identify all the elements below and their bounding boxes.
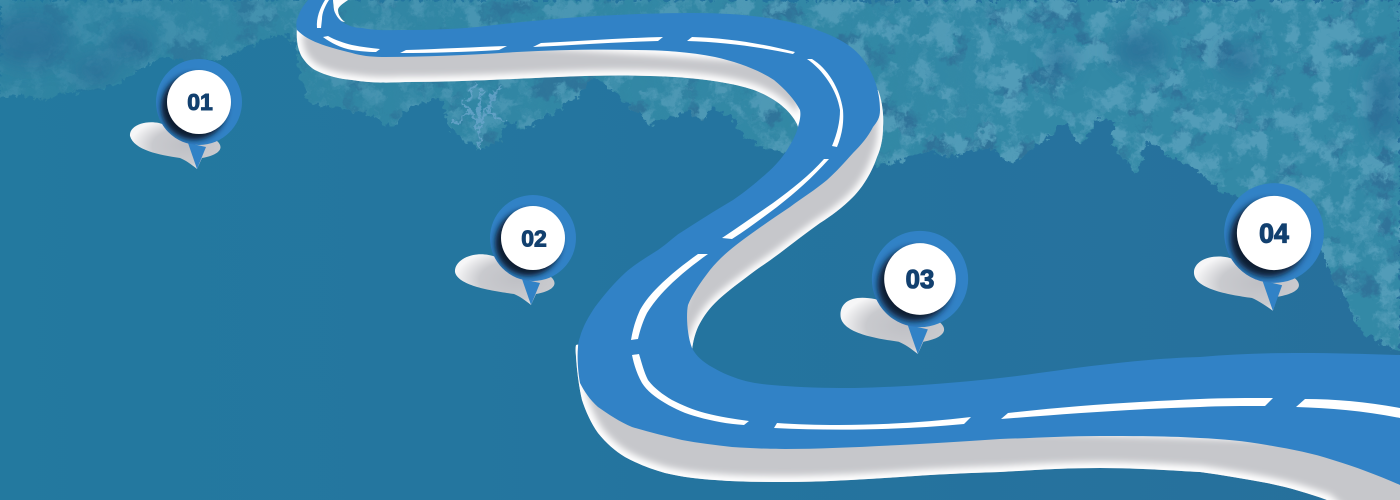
forest canopy bbox=[0, 0, 1400, 353]
pin 04: 04 bbox=[1259, 218, 1289, 248]
pin shadow bbox=[130, 122, 221, 169]
pin shadow bbox=[455, 254, 555, 305]
pin 02 bbox=[455, 195, 576, 305]
pin shadow bbox=[1194, 256, 1299, 311]
lane markings bbox=[317, 0, 1400, 430]
pale bare tree below the road bbox=[452, 84, 505, 150]
canopy tone overlay bbox=[0, 0, 1400, 353]
pin 01 bbox=[130, 59, 242, 169]
pin 03 bbox=[840, 231, 968, 354]
pin 03: 03 bbox=[906, 266, 934, 294]
road side wall bbox=[297, 0, 1400, 500]
pin shadow bbox=[840, 298, 944, 354]
pin 01: 01 bbox=[187, 89, 213, 115]
road surface bbox=[296, 0, 1400, 485]
dark canopy shadows bbox=[0, 14, 1400, 145]
pin 02: 02 bbox=[521, 226, 547, 252]
pin 04 bbox=[1194, 183, 1324, 311]
